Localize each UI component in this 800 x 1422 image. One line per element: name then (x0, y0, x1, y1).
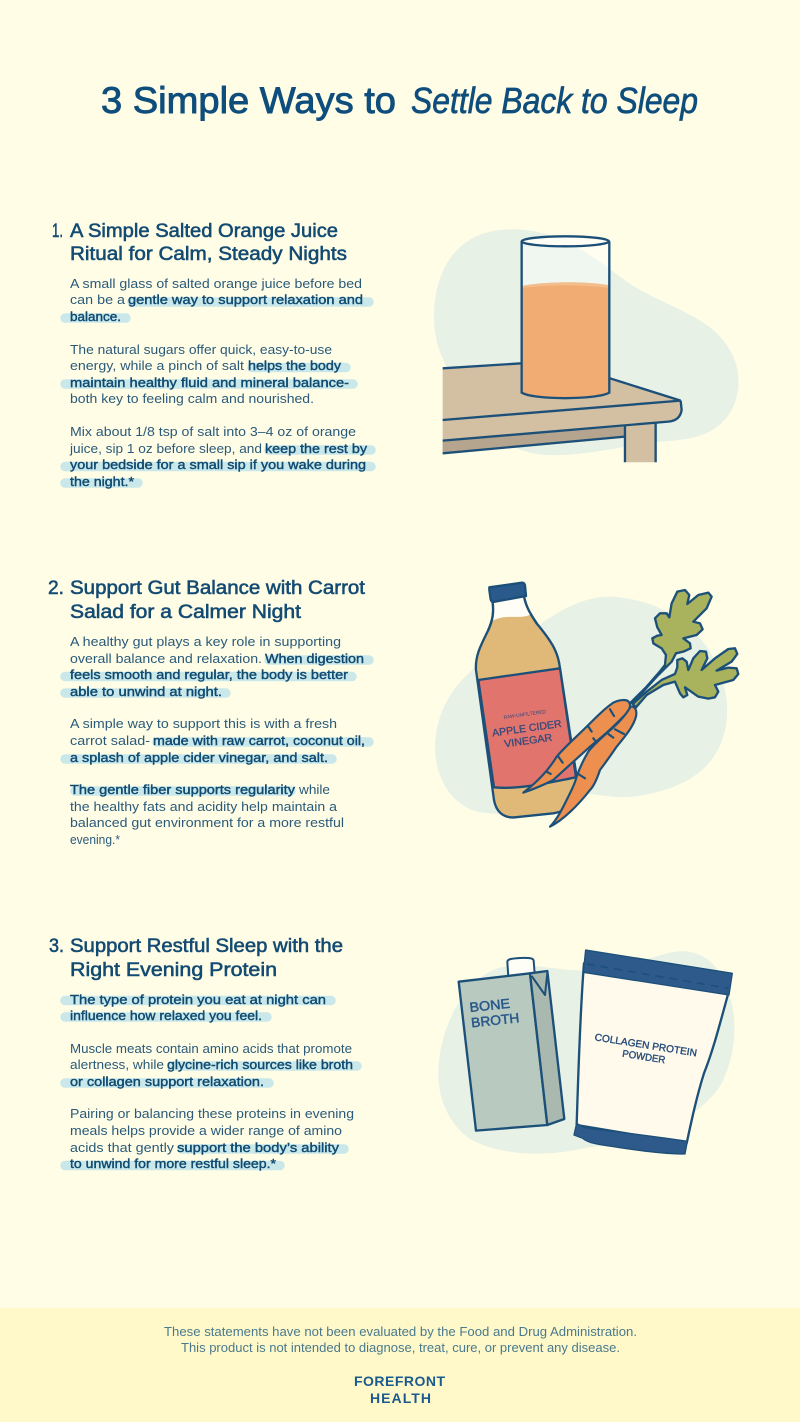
section 2 body text: able to unwind at night. (70, 684, 222, 699)
section 2: carrot salad text (48, 578, 369, 847)
section 1 highlights (65, 302, 371, 483)
section 2 body text (70, 634, 365, 847)
section 1 heading: A Simple Salted Orange Juice (70, 221, 338, 242)
section 1 heading: Ritual for Calm, Steady Nights (70, 244, 347, 265)
section 3 body text: Muscle meats contain amino acids that promote (70, 1041, 352, 1056)
section 3 heading: 3. (49, 936, 64, 957)
section 3 body text: meals helps provide a wider range of amino (70, 1123, 342, 1138)
section 1 body text: the night.* (70, 474, 134, 489)
glass (522, 236, 609, 398)
carrots (523, 700, 636, 827)
section 1 body text (69, 276, 368, 489)
bone broth carton: BONE (469, 996, 511, 1015)
section 1 body text: juice, sip 1 oz before sleep, and (69, 441, 262, 456)
background blob (434, 229, 739, 455)
section 1 body text: gentle way to support relaxation and (128, 292, 363, 307)
section 2 body text: When digestion (265, 651, 364, 666)
title: 3 Simple Ways to (101, 80, 396, 121)
section 2 highlights (65, 660, 369, 791)
section 2 body text: The gentle fiber supports regularity (70, 782, 296, 797)
section 1 heading: 1. (52, 221, 63, 242)
section 1 heading (52, 221, 347, 265)
background blob (438, 951, 734, 1154)
bottle (476, 583, 577, 817)
section 3 body text: influence how relaxed you feel. (70, 1008, 262, 1023)
bone broth carton (459, 958, 564, 1131)
section 1 body text: energy, while a pinch of salt (70, 358, 244, 373)
section 2 body text: A simple way to support this is with a fresh (70, 716, 337, 731)
footer band (0, 1308, 800, 1422)
section 3 body text: to unwind for more restful sleep.* (70, 1156, 276, 1171)
section 3: evening protein text (49, 936, 357, 1171)
section 1 body text: both key to feeling calm and nourished. (70, 391, 314, 406)
logo: Forefront Health: FOREFRONT (354, 1373, 445, 1389)
section 2 body text: made with raw carrot, coconut oil, (153, 733, 365, 748)
section 1 body text: helps the body (248, 358, 342, 373)
carrot greens (628, 590, 738, 707)
section 1 body text: The natural sugars offer quick, easy-to-use (70, 342, 332, 357)
section 3 heading (49, 936, 343, 981)
section 1 body text: maintain healthy fluid and mineral balance- (70, 375, 349, 390)
bottle: RAW-UNFILTERED (503, 709, 547, 721)
bottle: APPLE CIDER (492, 719, 562, 739)
section 3 body text: The type of protein you eat at night can (70, 992, 326, 1007)
section 2 heading: Support Gut Balance with Carrot (70, 578, 366, 599)
bottle: VINEGAR (504, 733, 553, 750)
section 1 body text: A small glass of salted orange juice before bed (70, 276, 362, 291)
section 2 body text: feels smooth and regular, the body is better (70, 667, 349, 682)
bone broth carton: BROTH (470, 1010, 520, 1030)
section 2 body text: carrot salad- (70, 733, 150, 748)
table (443, 363, 682, 462)
icon: apple cider vinegar and carrots (435, 583, 738, 827)
section 3 body text: Pairing or balancing these proteins in evening (70, 1106, 354, 1121)
section 1 body text: your bedside for a small sip if you wake during (70, 457, 366, 472)
section 1: salted orange juice text (52, 221, 371, 489)
title: Settle Back to Sleep (411, 80, 698, 121)
section 2 body text: a splash of apple cider vinegar, and salt. (70, 750, 328, 765)
icon: bone broth carton and collagen powder pouch (438, 950, 734, 1154)
section 2 body text: A healthy gut plays a key role in supporting (70, 634, 341, 649)
section 3 body text: glycine-rich sources like broth (167, 1057, 353, 1072)
collagen pouch (574, 950, 732, 1154)
section 3 heading: Right Evening Protein (70, 960, 277, 981)
section 3 body text: acids that gently (70, 1140, 175, 1155)
section 1 body text: balance. (70, 309, 121, 324)
collagen pouch: COLLAGEN PROTEIN (594, 1032, 698, 1059)
section 1 body text: can be a (70, 292, 126, 307)
title (101, 80, 698, 121)
logo: Forefront Health: HEALTH (370, 1390, 431, 1406)
background blob (435, 597, 727, 814)
section 1 body text: Mix about 1/8 tsp of salt into 3–4 oz of orange (70, 424, 356, 439)
disclaimer text: These statements have not been evaluated by the Food and Drug Administration. (164, 1325, 637, 1339)
icon: glass of orange juice on table (434, 229, 739, 462)
logo: Forefront Health (354, 1373, 445, 1406)
section 2 heading: 2. (48, 578, 64, 599)
section 2 body text: while (298, 782, 330, 797)
section 3 body text: support the body’s ability (177, 1140, 340, 1155)
section 3 heading: Support Restful Sleep with the (70, 936, 343, 957)
section 2 body text: evening.* (70, 832, 120, 847)
section 3 body text: alertness, while (70, 1057, 164, 1072)
section 3 body text: or collagen support relaxation. (70, 1074, 264, 1089)
collagen pouch: POWDER (621, 1049, 666, 1066)
disclaimer text (164, 1325, 637, 1355)
section 3 highlights (65, 1000, 357, 1166)
section 3 body text (70, 992, 354, 1171)
disclaimer text: This product is not intended to diagnose, treat, cure, or prevent any disease. (181, 1341, 620, 1355)
section 2 body text: overall balance and relaxation. (70, 651, 262, 666)
section 1 body text: keep the rest by (265, 441, 368, 456)
section 2 heading (48, 578, 366, 623)
section 2 heading: Salad for a Calmer Night (70, 602, 302, 623)
section 2 body text: balanced gut environment for a more restful (70, 815, 344, 830)
section 2 body text: the healthy fats and acidity help maintain a (70, 799, 338, 814)
